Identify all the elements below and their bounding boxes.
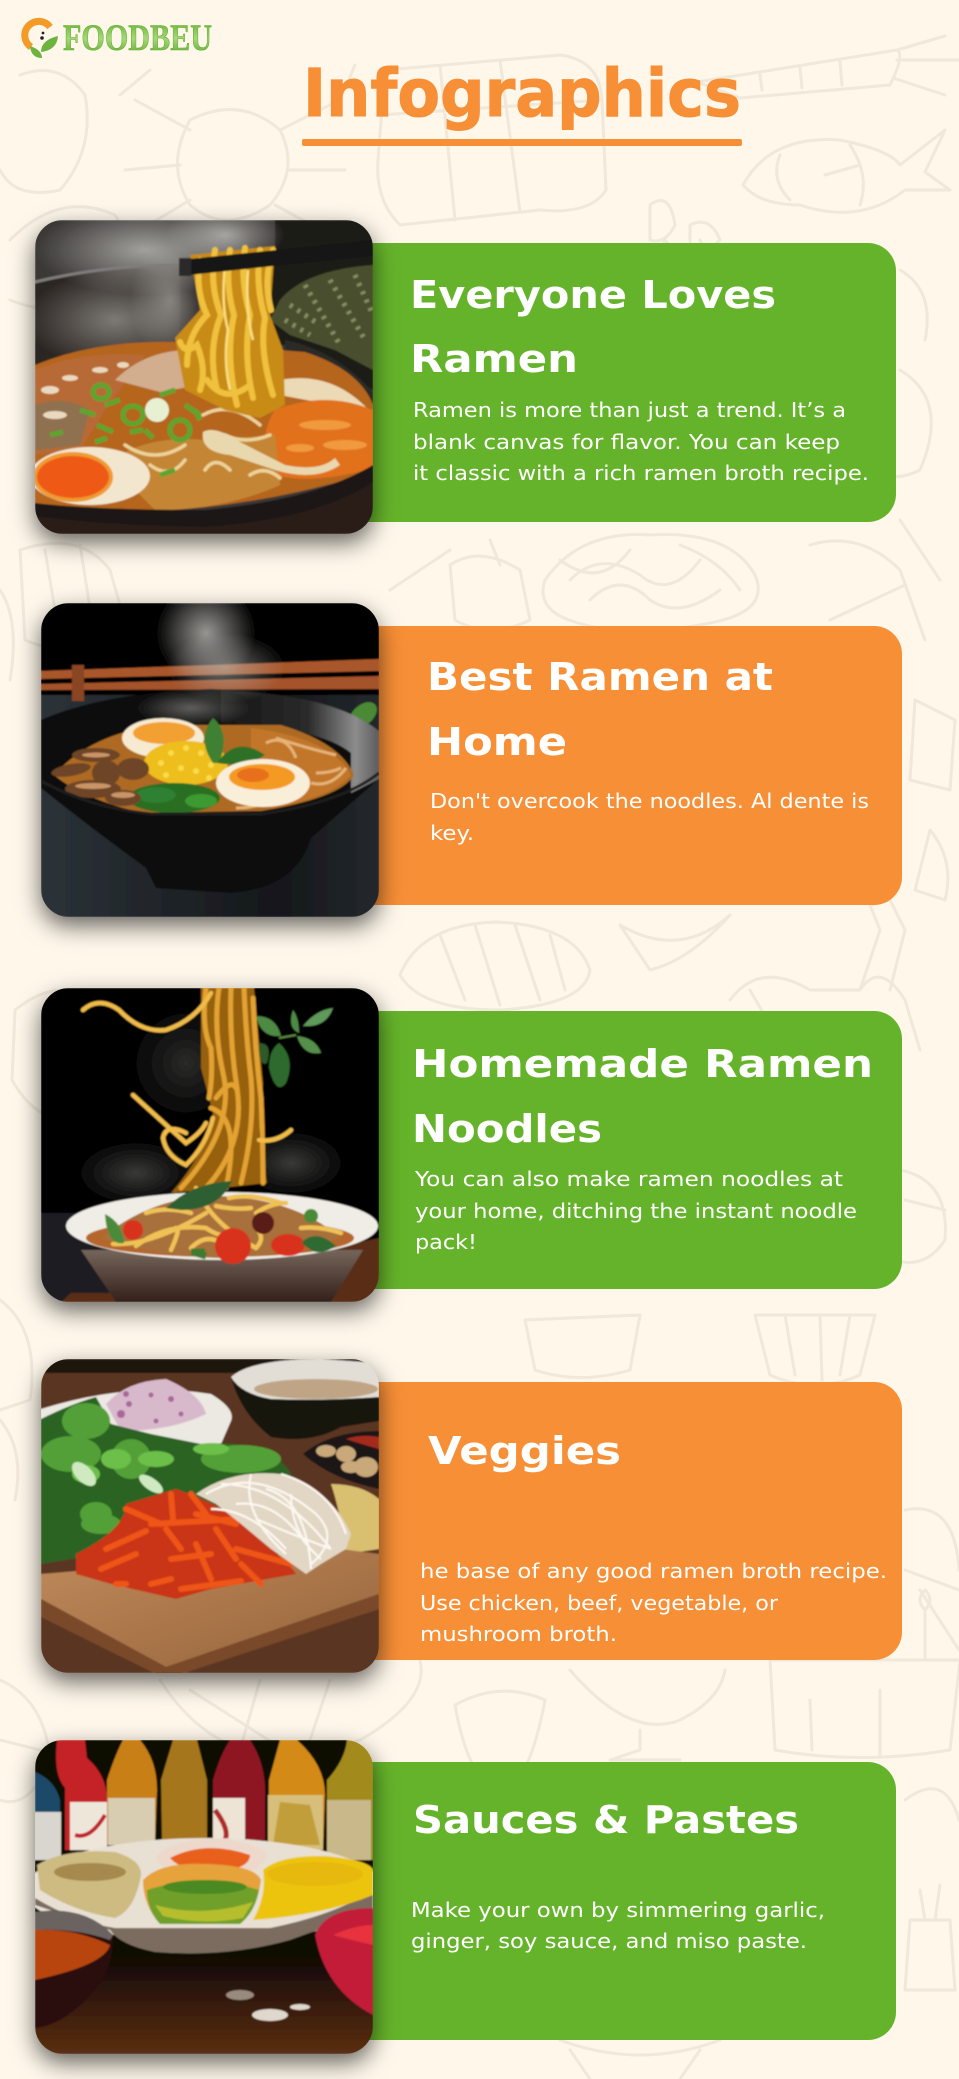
heading: Homemade Ramen: [412, 1042, 873, 1086]
card background: [345, 1382, 902, 1660]
body text: You can also make ramen noodles at: [414, 1167, 843, 1191]
panel: everyone loves ramen: [25, 205, 896, 534]
body text: pack!: [415, 1230, 477, 1254]
photo: ramen in black bowl: [41, 583, 382, 917]
card background: [345, 626, 902, 905]
title underline: [302, 139, 742, 146]
body text: key.: [430, 821, 474, 845]
heading: Ramen: [410, 337, 578, 381]
card background: [345, 1011, 902, 1289]
heading: Sauces & Pastes: [413, 1798, 799, 1842]
logo: Foodbeu: FOODBEU: [63, 18, 212, 59]
body text: mushroom broth.: [420, 1622, 617, 1646]
heading: Noodles: [412, 1107, 602, 1151]
photo: sauces and bottles: [25, 1740, 385, 2054]
body text: it classic with a rich ramen broth recipe.: [413, 461, 869, 485]
panel: veggies: [41, 1359, 902, 1679]
panel: homemade ramen noodles: [41, 988, 902, 1302]
heading: Veggies: [428, 1429, 621, 1473]
panel: best ramen at home: [41, 583, 902, 917]
heading: Best Ramen at: [427, 655, 773, 699]
body text: he base of any good ramen broth recipe.: [420, 1559, 887, 1583]
body text: ginger, soy sauce, and miso paste.: [411, 1929, 807, 1953]
logo: Foodbeu: [25, 18, 212, 59]
body text: Ramen is more than just a trend. It’s a: [413, 398, 846, 422]
body text: your home, ditching the instant noodle: [415, 1199, 857, 1223]
photo: vegetables on cutting board: [41, 1359, 379, 1679]
panel: sauces and pastes: [25, 1740, 896, 2054]
title: Infographics: [303, 55, 741, 132]
body text: Make your own by simmering garlic,: [411, 1898, 825, 1922]
heading: Everyone Loves: [410, 273, 776, 317]
body text: blank canvas for flavor. You can keep: [413, 430, 840, 454]
photo: ramen with noodles lifted: [25, 205, 373, 534]
card background: [340, 1762, 896, 2040]
body text: Don't overcook the noodles. Al dente is: [430, 789, 869, 813]
photo: noodles falling into white bowl: [41, 988, 379, 1302]
heading: Home: [427, 720, 567, 764]
body text: Use chicken, beef, vegetable, or: [420, 1591, 779, 1615]
card background: [340, 243, 896, 522]
